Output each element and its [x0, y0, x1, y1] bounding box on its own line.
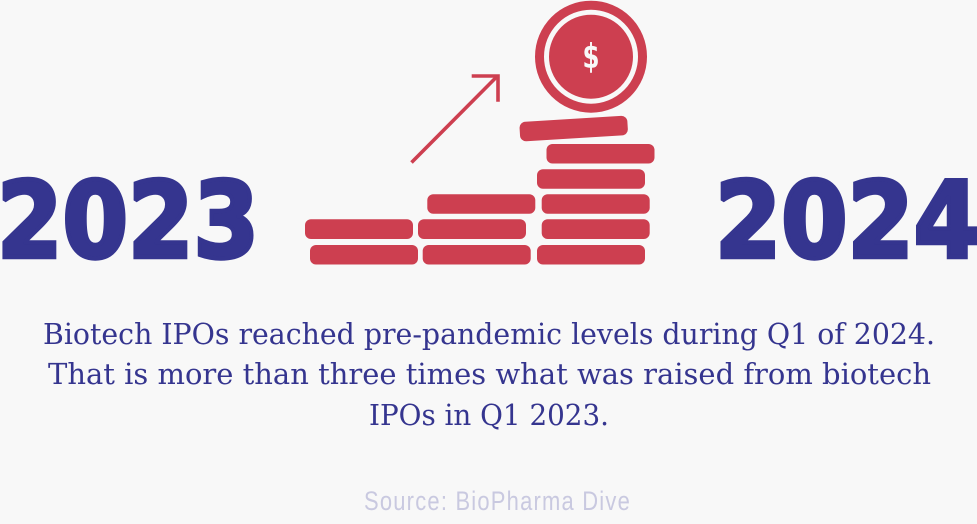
icon: dollar coin: $: [582, 37, 600, 77]
text block: description: Biotech IPOs reached pre-pandemic levels during Q1 of 2024.: [43, 318, 935, 351]
text block: description: [43, 318, 935, 432]
heading: 2023: 2023: [0, 160, 259, 282]
icon: stacks of coins with growth arrow: [305, 1, 654, 264]
coin stack 2: [418, 194, 535, 264]
text block: description: That is more than three times what was raised from biotech: [48, 358, 931, 391]
source note: Source: BioPharma Dive: [364, 486, 631, 516]
coin stack 3: [519, 116, 654, 264]
text block: description: IPOs in Q1 2023.: [369, 399, 609, 432]
coin stack 1: [305, 219, 418, 264]
icon: growth arrow: [412, 76, 498, 162]
icon: dollar coin: [535, 1, 647, 113]
